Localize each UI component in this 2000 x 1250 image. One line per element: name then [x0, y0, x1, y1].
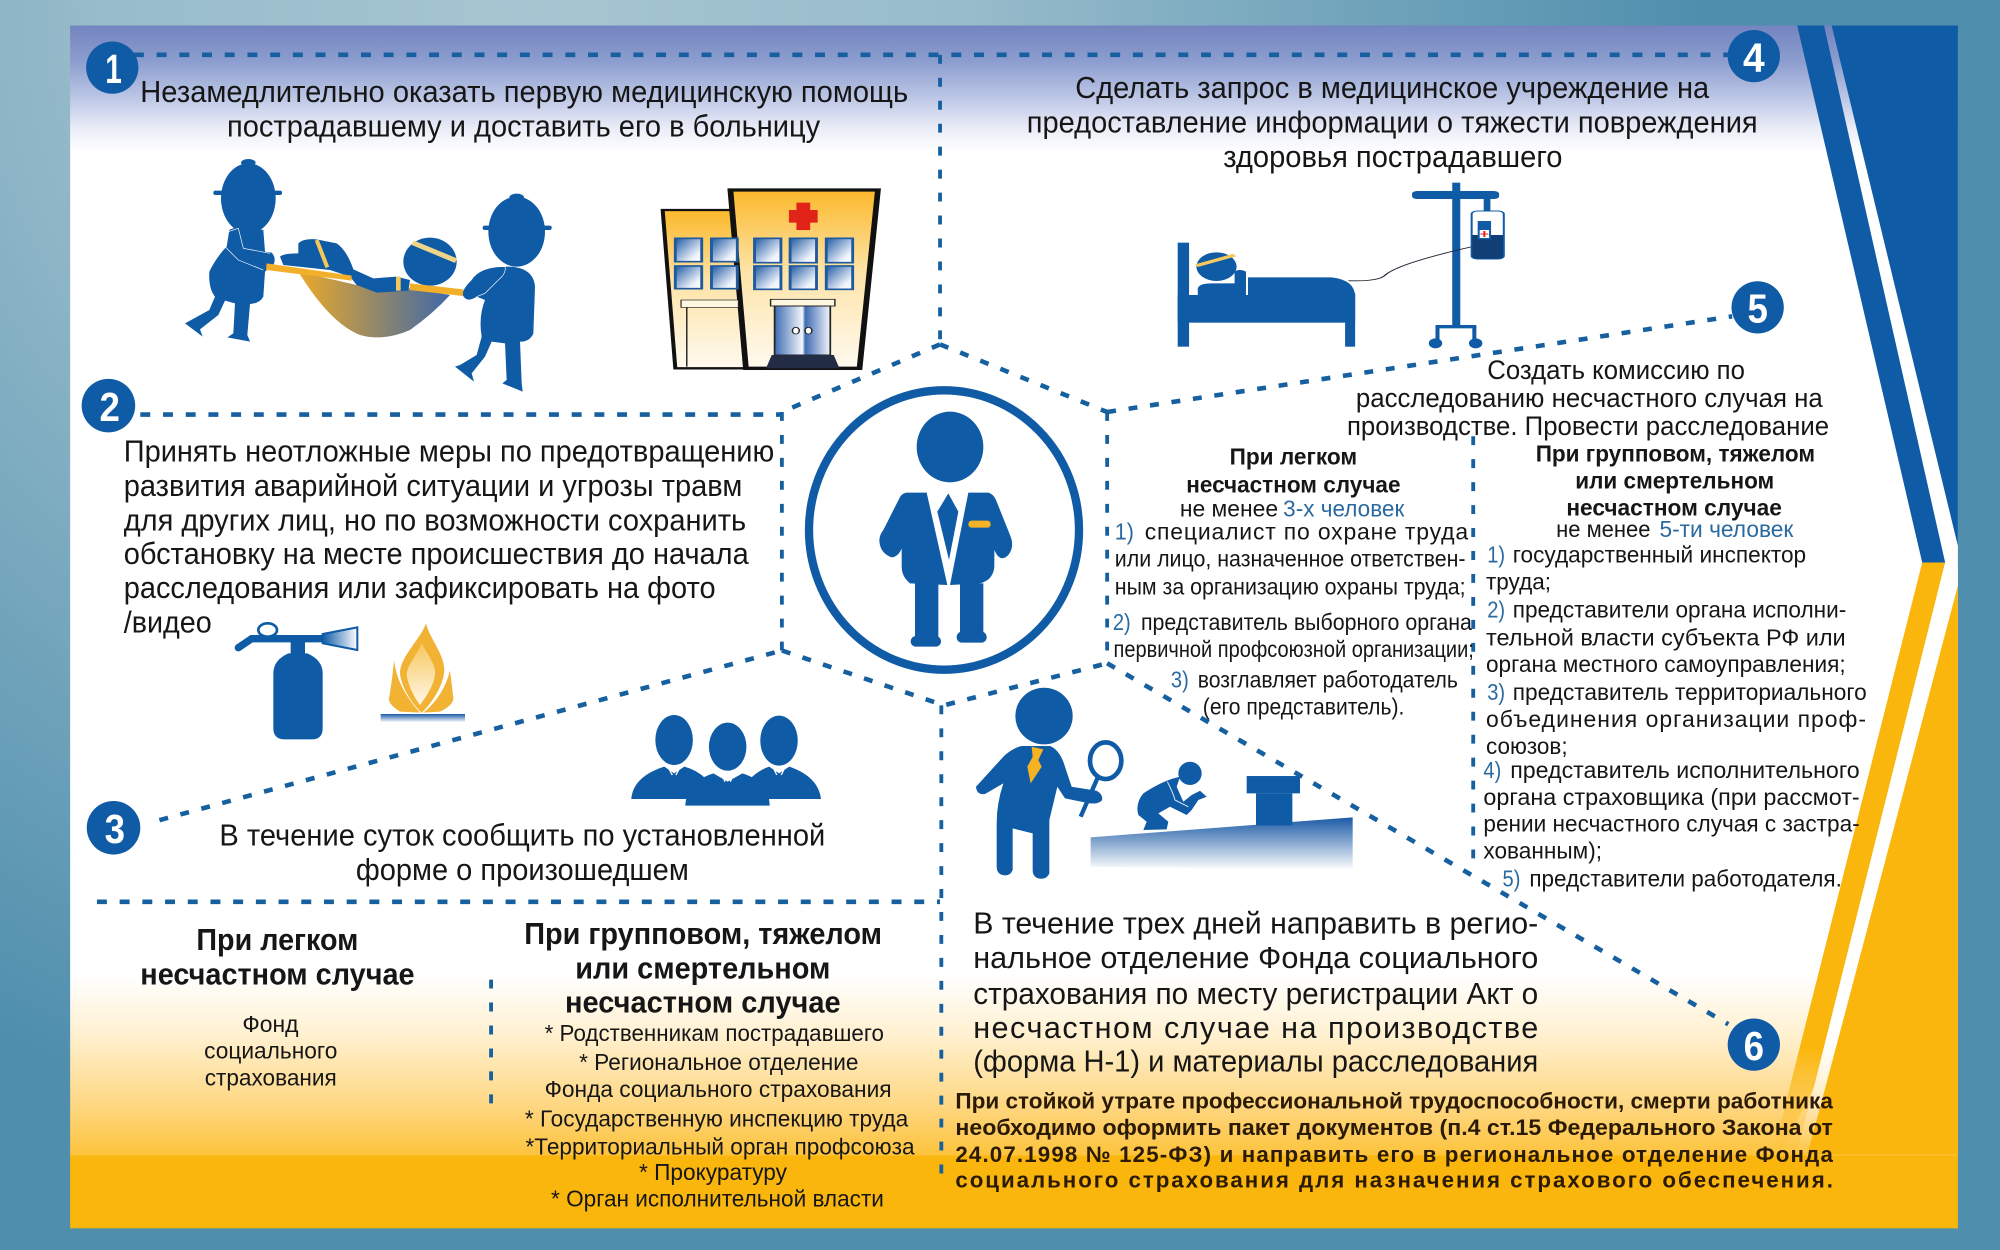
commission for minor accident: 3-х человек	[1283, 496, 1405, 522]
icon: workers carrying injured person on stretcher	[185, 159, 552, 392]
step 6 text: страхования по месту регистрации Акт о	[973, 977, 1538, 1011]
step 3 text	[219, 819, 825, 887]
commission for minor accident: ным за организацию охраны труда;	[1115, 573, 1466, 599]
step 6 text: В течение трех дней направить в регио-	[973, 907, 1538, 941]
commission for minor accident: 2)	[1113, 609, 1131, 635]
column: minor accident recipients: Фонд	[242, 1011, 298, 1037]
commission for severe accident: или смертельном	[1575, 468, 1774, 494]
step 3: report within a day	[87, 715, 915, 1212]
column: severe accident recipients	[524, 917, 915, 1212]
step 6: send documents to social insurance fund	[955, 688, 1833, 1192]
commission for severe accident: 2)	[1487, 596, 1505, 622]
column: severe accident recipients: несчастном случае	[565, 986, 841, 1020]
step 1 text: пострадавшему и доставить его в больницу	[227, 109, 821, 143]
central icon: manager in a circle	[809, 390, 1079, 670]
commission for minor accident: возглавляет работодатель	[1198, 667, 1458, 693]
step 2: prevent emergency	[82, 379, 774, 739]
commission for severe accident: рении несчастного случая с застра-	[1483, 811, 1860, 837]
step 2 text: расследования или зафиксировать на фото	[124, 571, 716, 605]
step 6 text: нальное отделение Фонда социального	[973, 941, 1538, 975]
commission for severe accident: государственный инспектор	[1513, 541, 1806, 567]
commission for severe accident: объединения организации проф-	[1486, 706, 1866, 732]
column: severe accident recipients: * Родственникам пострадавшего	[545, 1020, 884, 1046]
commission for minor accident: первичной профсоюзной организации;	[1114, 636, 1474, 662]
commission for severe accident: хованным);	[1483, 837, 1602, 863]
step 1 text	[140, 75, 908, 143]
number badge 2: 2	[99, 384, 120, 430]
commission for severe accident: 4)	[1483, 757, 1501, 783]
step 2 text: Принять неотложные меры по предотвращению	[124, 435, 774, 469]
number badge 3	[87, 801, 140, 855]
step 6 text: несчастном случае на производстве	[973, 1011, 1538, 1045]
commission for severe accident: 5-ти человек	[1659, 516, 1794, 542]
note on permanent disability or death: При стойкой утрате профессиональной трудоспособности, смерти работника	[955, 1088, 1833, 1113]
icon: three people in suits	[631, 715, 821, 806]
commission for severe accident: представитель исполнительного	[1510, 757, 1860, 783]
commission for minor accident: При легком	[1230, 443, 1357, 469]
step 2 text: /видео	[124, 606, 212, 640]
commission for severe accident: 5)	[1503, 865, 1520, 891]
number badge 6	[1728, 1018, 1780, 1071]
commission for severe accident: тельной власти субъекта РФ или	[1486, 624, 1846, 650]
commission for severe accident: представители органа исполни-	[1513, 596, 1846, 622]
number badge 4: 4	[1743, 34, 1765, 80]
column: minor accident recipients	[140, 923, 415, 1090]
commission for severe accident: органа страховщика (при рассмот-	[1483, 784, 1860, 810]
column: minor accident recipients: социального	[204, 1038, 337, 1064]
step 5 heading: производстве. Провести расследование	[1347, 411, 1829, 441]
commission for minor accident: специалист по охране труда	[1145, 519, 1468, 545]
number badge 2	[82, 379, 135, 432]
commission for minor accident	[1113, 443, 1474, 719]
commission for severe accident: 3)	[1487, 679, 1505, 705]
column: minor accident recipients: При легком	[196, 923, 358, 957]
note on permanent disability or death: 24.07.1998 № 125-ФЗ) и направить его в региональное отделение Фонда	[955, 1142, 1833, 1167]
number badge 5	[1732, 281, 1784, 334]
step 1: first aid	[86, 41, 908, 392]
icon: fire extinguisher	[238, 623, 357, 739]
commission for severe accident: представители работодателя.	[1529, 865, 1842, 891]
commission for minor accident: (его представитель).	[1203, 693, 1404, 719]
commission for severe accident: 1)	[1487, 541, 1505, 567]
icon: hospital building	[663, 190, 878, 368]
commission for severe accident: союзов;	[1486, 733, 1568, 759]
commission for severe accident: несчастном случае	[1566, 494, 1782, 520]
step 3 text: форме о произошедшем	[356, 853, 689, 887]
column: severe accident recipients: Фонда социального страхования	[545, 1076, 892, 1102]
commission for minor accident: 3)	[1171, 667, 1189, 693]
step 5 heading: расследованию несчастного случая на	[1356, 383, 1823, 413]
commission for minor accident: 1)	[1115, 519, 1134, 545]
right decorative stripes	[1773, 26, 1958, 1154]
commission for severe accident: представитель территориального	[1513, 679, 1867, 705]
step 2 text: для других лиц, но по возможности сохранить	[124, 504, 746, 538]
note on permanent disability or death: социального страхования для назначения страхового обеспечения.	[955, 1167, 1833, 1192]
number badge 6: 6	[1744, 1023, 1764, 1069]
commission for severe accident: При групповом, тяжелом	[1536, 441, 1815, 467]
number badge 1: 1	[105, 46, 122, 92]
step 2 text: обстановку на месте происшествия до начала	[124, 537, 750, 571]
step 6 text: (форма Н-1) и материалы расследования	[973, 1044, 1538, 1078]
number badge 4	[1728, 30, 1780, 82]
commission for severe accident: не менее	[1556, 516, 1651, 542]
column: severe accident recipients: * Государственную инспекцию труда	[525, 1105, 908, 1131]
number badge 3: 3	[105, 806, 125, 852]
column: severe accident recipients: *Территориальный орган профсоюза	[526, 1133, 915, 1159]
step 2 text: развития аварийной ситуации и угрозы травм	[124, 469, 742, 503]
step 4 text	[1027, 71, 1758, 174]
step 4 text: здоровья пострадавшего	[1223, 140, 1562, 174]
step 2 text	[124, 435, 774, 640]
note on permanent disability or death: необходимо оформить пакет документов (п.4 ст.15 Федерального Закона от	[955, 1115, 1833, 1140]
icon: worker crouching on a roof with chimney	[1091, 762, 1353, 870]
step 5: investigation commission	[1113, 281, 1867, 891]
step 4 text: предоставление информации о тяжести повреждения	[1027, 106, 1758, 140]
commission for severe accident	[1483, 441, 1867, 891]
commission for minor accident: не менее	[1180, 496, 1278, 522]
step 5 heading	[1347, 355, 1829, 441]
column: severe accident recipients: * Орган исполнительной власти	[551, 1186, 884, 1212]
note on permanent disability or death	[955, 1088, 1833, 1192]
column: severe accident recipients: или смертельном	[575, 951, 830, 985]
commission for severe accident: труда;	[1486, 568, 1551, 594]
commission for minor accident: несчастном случае	[1186, 471, 1401, 497]
step 6 text	[973, 907, 1538, 1078]
dashed connector lines	[97, 55, 1732, 1173]
column: minor accident recipients: страхования	[205, 1064, 337, 1090]
icon: inspector with magnifying glass	[976, 688, 1121, 879]
column: minor accident recipients: несчастном случае	[140, 958, 415, 992]
column: severe accident recipients: * Региональное отделение	[579, 1049, 858, 1075]
step 5 heading: Создать комиссию по	[1487, 355, 1745, 385]
column: severe accident recipients: При групповом, тяжелом	[524, 917, 882, 951]
step 4 text: Сделать запрос в медицинское учреждение на	[1075, 71, 1710, 105]
icon: patient in bed with IV drip	[1178, 183, 1504, 348]
column: severe accident recipients: * Прокуратуру	[639, 1159, 788, 1185]
step 3 text: В течение суток сообщить по установленной	[219, 819, 825, 853]
step 4: request to medical institution	[1027, 30, 1780, 348]
commission for minor accident: представитель выборного органа	[1141, 609, 1472, 635]
number badge 5: 5	[1747, 286, 1768, 332]
icon: flame	[381, 623, 465, 722]
step 1 text: Незамедлительно оказать первую медицинскую помощь	[140, 75, 908, 109]
number badge 1	[86, 41, 138, 94]
commission for severe accident: органа местного самоуправления;	[1486, 651, 1846, 677]
commission for minor accident: или лицо, назначенное ответствен-	[1115, 545, 1466, 571]
